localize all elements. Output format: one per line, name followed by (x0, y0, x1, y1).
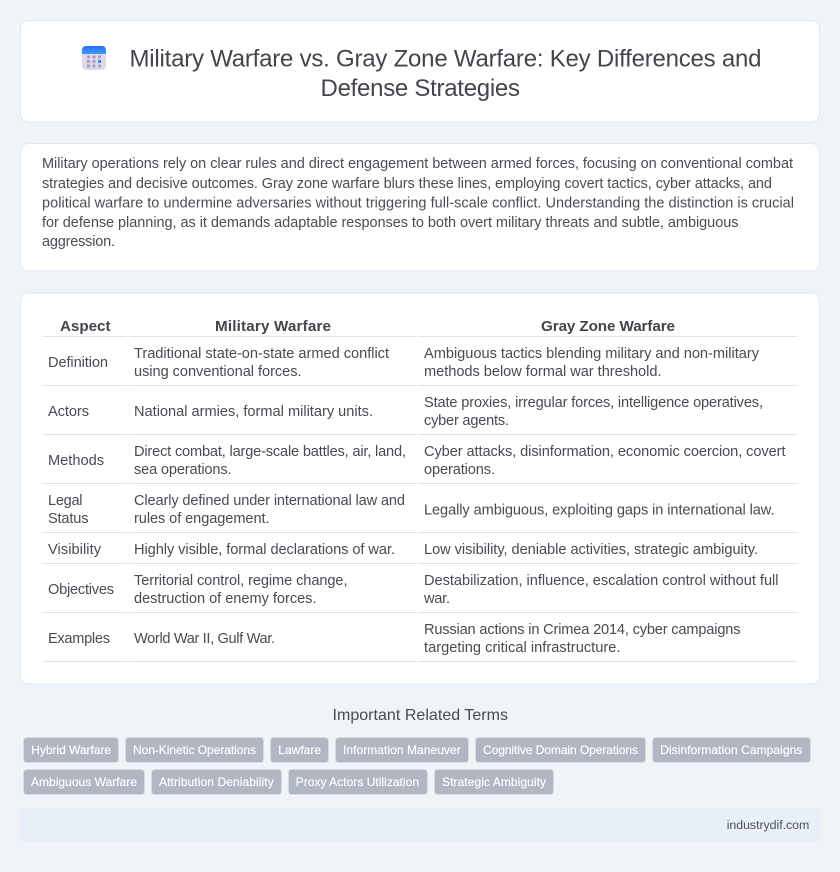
row: Definition: Traditional state-on-state armed conflict (134, 346, 389, 362)
row: Objectives (48, 573, 778, 607)
row: Objectives: war. (423, 591, 450, 607)
row: Definition: Ambiguous tactics blending military and non-military (424, 346, 760, 362)
title: Defense Strategies (320, 75, 520, 102)
row: Definition (48, 346, 760, 380)
row: Actors: cyber agents. (424, 413, 509, 429)
text block: introduction paragraph (42, 156, 794, 250)
table header (60, 318, 675, 335)
row: Actors: Actors (48, 404, 89, 420)
row: Definition: Definition (48, 355, 108, 371)
row: Methods: sea operations. (134, 462, 232, 478)
tag list: related terms: Disinformation Campaigns (660, 743, 802, 757)
row: Objectives: Territorial control, regime change, (134, 573, 348, 589)
tag list: related terms: Ambiguous Warfare (31, 775, 137, 789)
tag list: related terms (24, 738, 810, 794)
row: Methods: Direct combat, large-scale battles, air, land, (134, 444, 406, 460)
row: Objectives: Destabilization, influence, escalation control without full (424, 573, 778, 589)
heading: related terms: Important Related Terms (332, 707, 508, 724)
title (130, 46, 762, 102)
footer: industrydif.com (727, 818, 809, 832)
icon: calendar (82, 46, 106, 70)
row: Objectives: destruction of enemy forces. (134, 591, 316, 607)
row: Legal Status (48, 493, 774, 527)
row: Legal Status: Clearly defined under international law and (134, 493, 405, 509)
panel: header (20, 20, 820, 122)
tag list: related terms: Proxy Actors Utilization (296, 775, 419, 789)
row: Visibility: Highly visible, formal declarations of war. (134, 542, 395, 558)
footer (20, 808, 820, 842)
row: Visibility (48, 542, 758, 558)
row: Examples: World War II, Gulf War. (134, 631, 275, 647)
row: Visibility: Low visibility, deniable activities, strategic ambiguity. (424, 542, 758, 558)
row: Examples: targeting critical infrastructure. (424, 640, 620, 656)
tag list: related terms: Attribution Deniability (159, 775, 274, 789)
table header: Gray Zone Warfare (541, 318, 675, 335)
tag list: related terms: Strategic Ambiguity (442, 775, 546, 789)
panel: comparison table (20, 293, 820, 684)
text block: introduction paragraph: Military operations rely on clear rules and direct engagement between armed forces, focusing on conventional combat (42, 156, 793, 172)
table header: Aspect (60, 318, 110, 335)
row: Examples (48, 622, 740, 656)
tag list: related terms: Hybrid Warfare (31, 743, 111, 757)
tag list: related terms: Non-Kinetic Operations (133, 743, 256, 757)
row: Definition: using conventional forces. (134, 364, 302, 380)
row: Legal Status: Status (48, 511, 88, 527)
table header: Military Warfare (215, 318, 331, 335)
row: Methods (48, 444, 786, 478)
text block: introduction paragraph: for defense planning, as it demands adaptable responses to both overt military threats and subtle, ambiguous (42, 215, 738, 231)
text block: introduction paragraph: political warfare to undermine adversaries without triggering full-scale conflict. Understanding the distinction is crucial (42, 196, 794, 212)
row: Actors: National armies, formal military units. (134, 404, 373, 420)
text block: introduction paragraph: aggression. (42, 234, 115, 250)
row: Examples: Russian actions in Crimea 2014, cyber campaigns (424, 622, 740, 638)
row: Objectives: Objectives (48, 582, 114, 598)
row: Legal Status: Legally ambiguous, exploiting gaps in international law. (424, 502, 774, 518)
row: Definition: methods below formal war threshold. (424, 364, 662, 380)
row: Actors: State proxies, irregular forces, intelligence operatives, (424, 395, 763, 411)
row: Examples: Examples (48, 631, 110, 647)
row: Methods: Cyber attacks, disinformation, economic coercion, covert (424, 444, 786, 460)
row: Methods: Methods (48, 453, 104, 469)
text block: introduction paragraph: strategies and decisive outcomes. Gray zone warfare blurs these lines, employing covert tactics, cyber attacks, and (42, 176, 772, 192)
row: Legal Status: rules of engagement. (134, 511, 270, 527)
tag list: related terms: Lawfare (278, 743, 321, 757)
tag list: related terms: Cognitive Domain Operations (483, 743, 638, 757)
row: Actors (48, 395, 763, 429)
row: Methods: operations. (424, 462, 495, 478)
row: Legal Status: Legal (48, 493, 82, 509)
row: Visibility: Visibility (48, 542, 102, 558)
panel: introduction (20, 144, 820, 271)
title: Military Warfare vs. Gray Zone Warfare: Key Differences and (130, 46, 762, 72)
tag list: related terms: Information Maneuver (343, 743, 461, 757)
